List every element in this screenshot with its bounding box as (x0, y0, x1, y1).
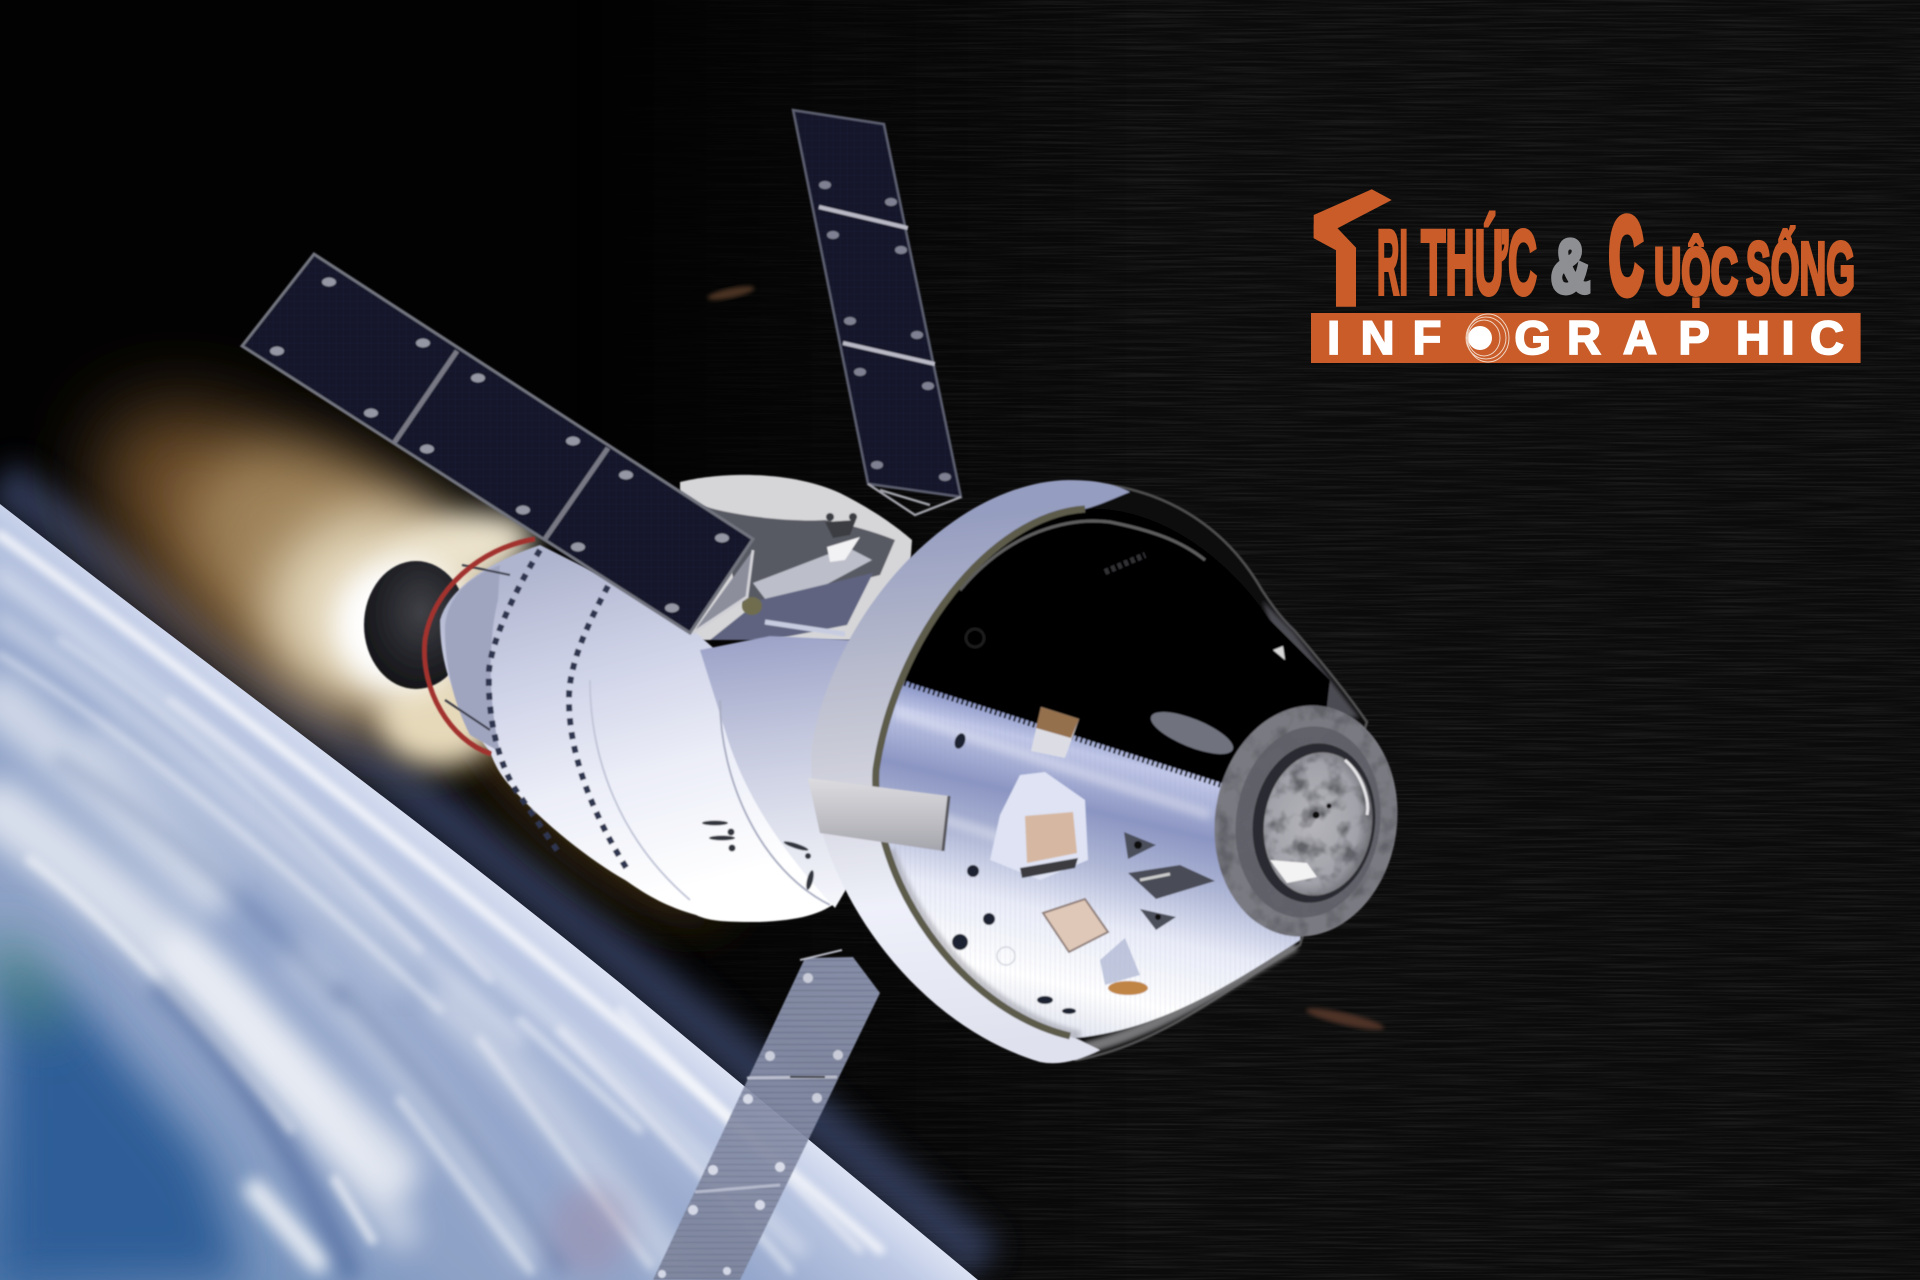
wordmark: UỘC (1654, 234, 1738, 308)
icon: ringed O (1466, 314, 1509, 362)
wordmark: THỨC (1421, 211, 1537, 314)
orange patch (1108, 981, 1148, 995)
logo: Tri Thức & Cuộc Sống Infographic (1304, 189, 1861, 364)
rivets (952, 732, 1076, 1014)
infographic label: R (1567, 311, 1601, 364)
solar panel: upper right (793, 110, 961, 515)
orange bar (1311, 313, 1861, 363)
deep blue ocean (0, 960, 245, 1280)
copper tile upper (1031, 707, 1079, 758)
infographic label: I (1327, 311, 1340, 364)
infographic label: C (1810, 311, 1844, 364)
infographic label: H (1736, 311, 1770, 364)
capsule interior (878, 508, 1330, 1039)
windows (1124, 832, 1156, 859)
red ring (424, 539, 535, 754)
infographic label: F (1413, 311, 1441, 364)
inner rim line (876, 509, 1085, 1036)
upper hull reflection oval (1146, 704, 1238, 762)
lower shell band (1085, 945, 1295, 1048)
aft shell (440, 545, 840, 922)
infographic label: A (1623, 311, 1657, 364)
adapter section (700, 622, 905, 908)
neck shading (1262, 600, 1360, 718)
docking ring (1200, 693, 1412, 949)
solar panel: upper left (242, 254, 753, 633)
thruster mark (1273, 646, 1285, 660)
capsule outer shell (869, 483, 1367, 1060)
row of bolts 1 (489, 550, 559, 853)
service module body (440, 545, 905, 922)
wordmark (1377, 195, 1855, 316)
copper tile lower (1043, 899, 1108, 952)
solar panel: lower (653, 950, 880, 1280)
infographic label: G (1514, 311, 1551, 364)
infographic label: N (1361, 311, 1395, 364)
wordmark: RI (1377, 212, 1408, 314)
logo mark: stylised T: T (1304, 199, 1388, 333)
wordmark: C (1609, 195, 1643, 316)
ampersand: & (1551, 225, 1590, 308)
struts (445, 565, 510, 730)
pink haze (550, 1185, 630, 1275)
infographic label (1327, 311, 1844, 364)
strap (808, 778, 949, 851)
debris streaks (706, 283, 1385, 1034)
silver highlights (885, 712, 1210, 850)
motion blurred cloud masses (0, 535, 880, 1270)
aft dark section (445, 565, 500, 752)
top rim highlight (960, 521, 1205, 590)
logo mark: stylised T (1314, 189, 1392, 307)
green tint on ocean (0, 922, 72, 1038)
silver reflection (878, 680, 1302, 1039)
fittings (702, 820, 815, 890)
infographic label: P (1678, 311, 1710, 364)
gold fitting (742, 597, 762, 615)
infographic label: I (1781, 311, 1795, 364)
earth atmosphere glow (0, 480, 985, 1262)
crew module (808, 480, 1412, 1090)
background: space (731, 0, 1920, 1280)
service module dome (680, 475, 912, 640)
heat shield ring band (811, 480, 1130, 1063)
faint marking (1105, 555, 1145, 572)
copper tile middle (990, 772, 1088, 880)
earth (0, 504, 978, 1280)
engine nozzle (364, 561, 468, 689)
row of bolts 2 (569, 586, 627, 869)
lower shadow (890, 850, 1080, 1036)
engine exhaust glow (48, 349, 752, 948)
